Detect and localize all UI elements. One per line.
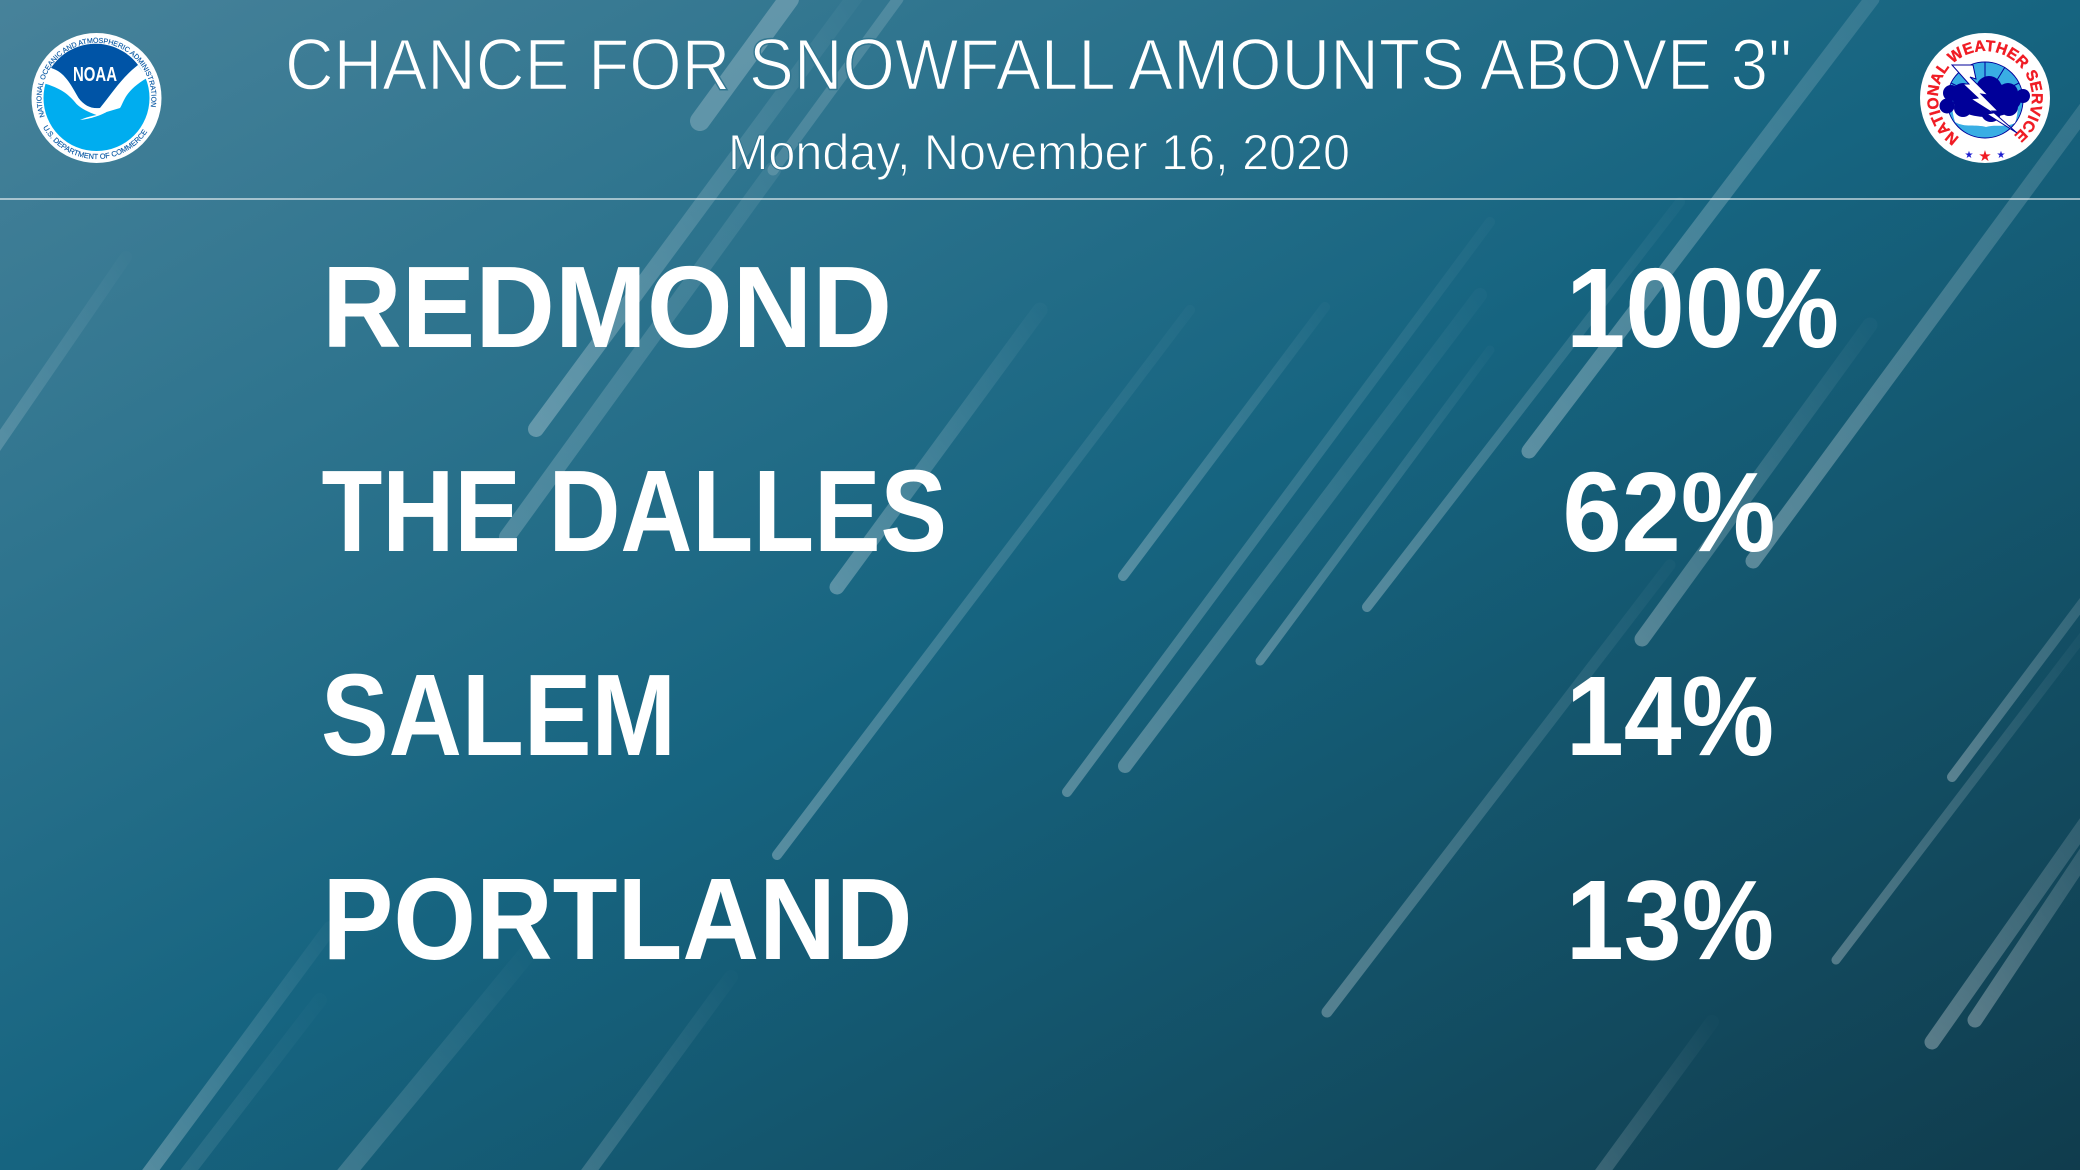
city: Salem: SALEM (321, 650, 676, 780)
icon: National Weather Service logo: ★ (1997, 150, 2006, 161)
icon: National Weather Service logo: ★ (1978, 147, 1992, 165)
icon: National Weather Service logo (1920, 33, 2050, 165)
icon: NOAA logo (32, 33, 162, 163)
NOAA ring text top: NATIONAL OCEANIC AND ATMOSPHERIC ADMINISTRATION (36, 38, 156, 118)
city: Portland: PORTLAND (322, 854, 912, 984)
NWS ring text: NATIONAL WEATHER SERVICE (1927, 40, 2043, 146)
stars: ★ (1965, 150, 1974, 161)
city: The Dalles: THE DALLES (322, 446, 947, 576)
lightning bolt (1952, 65, 2017, 133)
value: The Dalles: 62% (1562, 449, 1776, 575)
storm cloud (1940, 76, 2030, 122)
NOAA ring text bottom: U.S. DEPARTMENT OF COMMERCE (44, 125, 148, 160)
value: Portland: 13% (1566, 857, 1774, 983)
NOAA wordmark: NOAA (73, 64, 117, 86)
subtitle date: Monday, November 16, 2020 (728, 124, 1350, 180)
value: Salem: 14% (1566, 653, 1774, 779)
header divider line (0, 198, 2080, 200)
value: Redmond: 100% (1566, 245, 1839, 371)
city: Redmond: REDMOND (322, 242, 892, 372)
title: CHANCE FOR SNOWFALL AMOUNTS ABOVE 3" (285, 26, 1792, 106)
